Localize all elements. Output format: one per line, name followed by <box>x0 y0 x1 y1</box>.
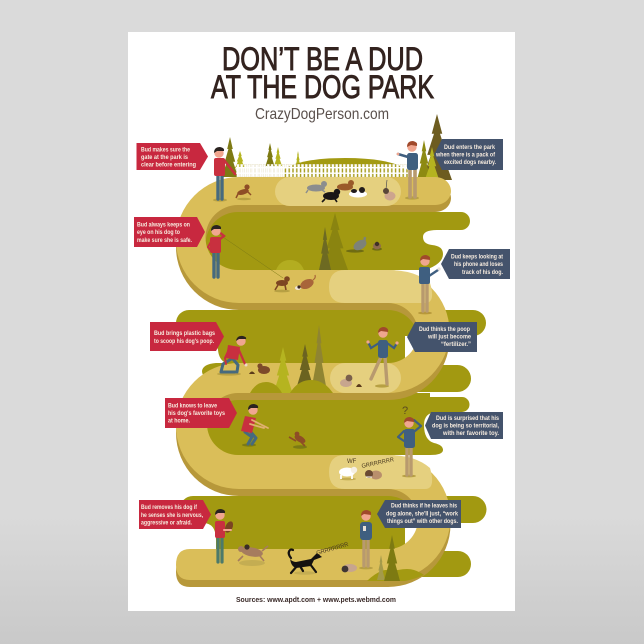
callout: fertilizer: will just become <box>427 334 471 340</box>
sources: Sources: www.apdt.com + www.pets.webmd.com <box>236 595 396 604</box>
winding path shadow <box>176 184 451 587</box>
lawn row repaint over shadow <box>190 270 388 556</box>
callout: territorial: dog is being so territorial, <box>432 422 499 430</box>
lawn and path trees <box>250 213 424 581</box>
dog: territorial with toy <box>289 432 307 449</box>
callout: fertilizer <box>407 322 477 352</box>
callout: eye on dog: Bud always keeps on <box>137 222 190 228</box>
figure: Dud entering park <box>397 141 419 200</box>
callout: gate: Bud makes sure the <box>141 146 190 154</box>
figure: Dud confused <box>398 417 421 477</box>
dog: brown fighting <box>238 544 268 566</box>
question mark: ? <box>402 405 408 417</box>
callout: gate: clear before entering <box>141 162 196 168</box>
callout: plastic bags: to scoop his dog's poop. <box>154 338 214 345</box>
callout: excited dogs: when there is a pack of <box>435 152 496 158</box>
title: DON’T BE A DUD <box>222 41 423 77</box>
dog and poop: Bud's <box>249 363 270 374</box>
background trees behind the park <box>222 114 452 180</box>
callout: territorial: Dud is surprised that his <box>436 415 499 422</box>
growl: GRRRRRRR black dog: GRRRRRRR <box>316 542 350 557</box>
callout: work things out <box>377 500 461 528</box>
callout: favorite toys: Bud knows to leave <box>168 402 217 410</box>
callout: eye on dog <box>134 217 205 247</box>
callout: phone <box>441 249 510 279</box>
dogs: excited pack <box>306 180 396 202</box>
callout: excited dogs: Dud enters the park <box>444 144 495 151</box>
figure: Dud hands crossed <box>359 510 373 569</box>
growl: WF: WF <box>347 459 357 465</box>
callout: favorite toys: his dog's favorite toys <box>168 410 225 417</box>
olive lawn rows <box>176 205 486 577</box>
callout: removes dog: aggressive or afraid. <box>141 520 192 526</box>
hill behind fence <box>283 158 408 178</box>
callout: work things out: dog alone, she'll just, “work <box>386 510 458 518</box>
callout: removes dog <box>139 500 211 529</box>
callout: territorial <box>425 412 503 439</box>
dog: black growling <box>289 550 322 575</box>
callout: phone: his phone and loses <box>454 261 503 268</box>
callout: phone: track of his dog. <box>462 269 503 276</box>
dogs: gray and pug on lawn <box>346 237 382 253</box>
callout: fertilizer: “fertilizer.” <box>441 341 471 348</box>
dogs: white and tan growling <box>339 467 382 480</box>
title <box>211 41 434 105</box>
fence <box>236 164 408 177</box>
callout: excited dogs <box>434 139 503 170</box>
figure: Dud with phone <box>418 255 441 314</box>
callout: removes dog: Bud removes his dog if <box>141 504 198 511</box>
growl: GRRRRRRR: GRRRRRRR <box>361 457 395 470</box>
callout: eye on dog: eye on his dog to <box>137 229 180 236</box>
callout: plastic bags: Bud brings plastic bags <box>154 330 215 337</box>
callout: gate <box>136 143 208 170</box>
callout: phone: Dud keeps looking at <box>451 254 503 260</box>
callout: fertilizer: Dud thinks the poop <box>419 326 470 333</box>
callout: territorial: with her favorite toy. <box>442 430 499 437</box>
dog: brown running <box>236 184 251 200</box>
dog: nervous small <box>342 564 357 572</box>
figure: Bud watching dog <box>208 225 283 278</box>
figure: Bud scooping poop <box>217 336 248 376</box>
dog and poop: pug <box>340 375 362 387</box>
figure: Dud shrugging <box>366 327 399 388</box>
callout: work things out: Dud thinks if he leaves his <box>391 502 457 510</box>
figure: Bud at gate <box>213 147 235 202</box>
website subtitle: CrazyDogPerson.com <box>255 106 389 123</box>
callout: excited dogs: excited dogs nearby. <box>444 159 496 166</box>
winding sand path <box>176 177 451 580</box>
callout: plastic bags <box>150 322 224 351</box>
callout: favorite toys <box>165 398 237 428</box>
figure: Bud crouching with toy <box>241 404 268 447</box>
callout: favorite toys: at home. <box>168 418 190 424</box>
callout: work things out: things out” with other dogs. <box>387 518 458 525</box>
callout: gate: gate at the park is <box>141 154 188 161</box>
poster sheet <box>128 32 515 611</box>
title: AT THE DOG PARK <box>211 69 434 105</box>
dogs: on leash and digging <box>274 275 315 292</box>
callout: eye on dog: make sure she is safe. <box>137 237 192 244</box>
callout: removes dog: he senses she is nervous, <box>141 512 203 519</box>
light path patches <box>275 177 432 489</box>
figure: Bud carrying dog <box>215 509 235 562</box>
